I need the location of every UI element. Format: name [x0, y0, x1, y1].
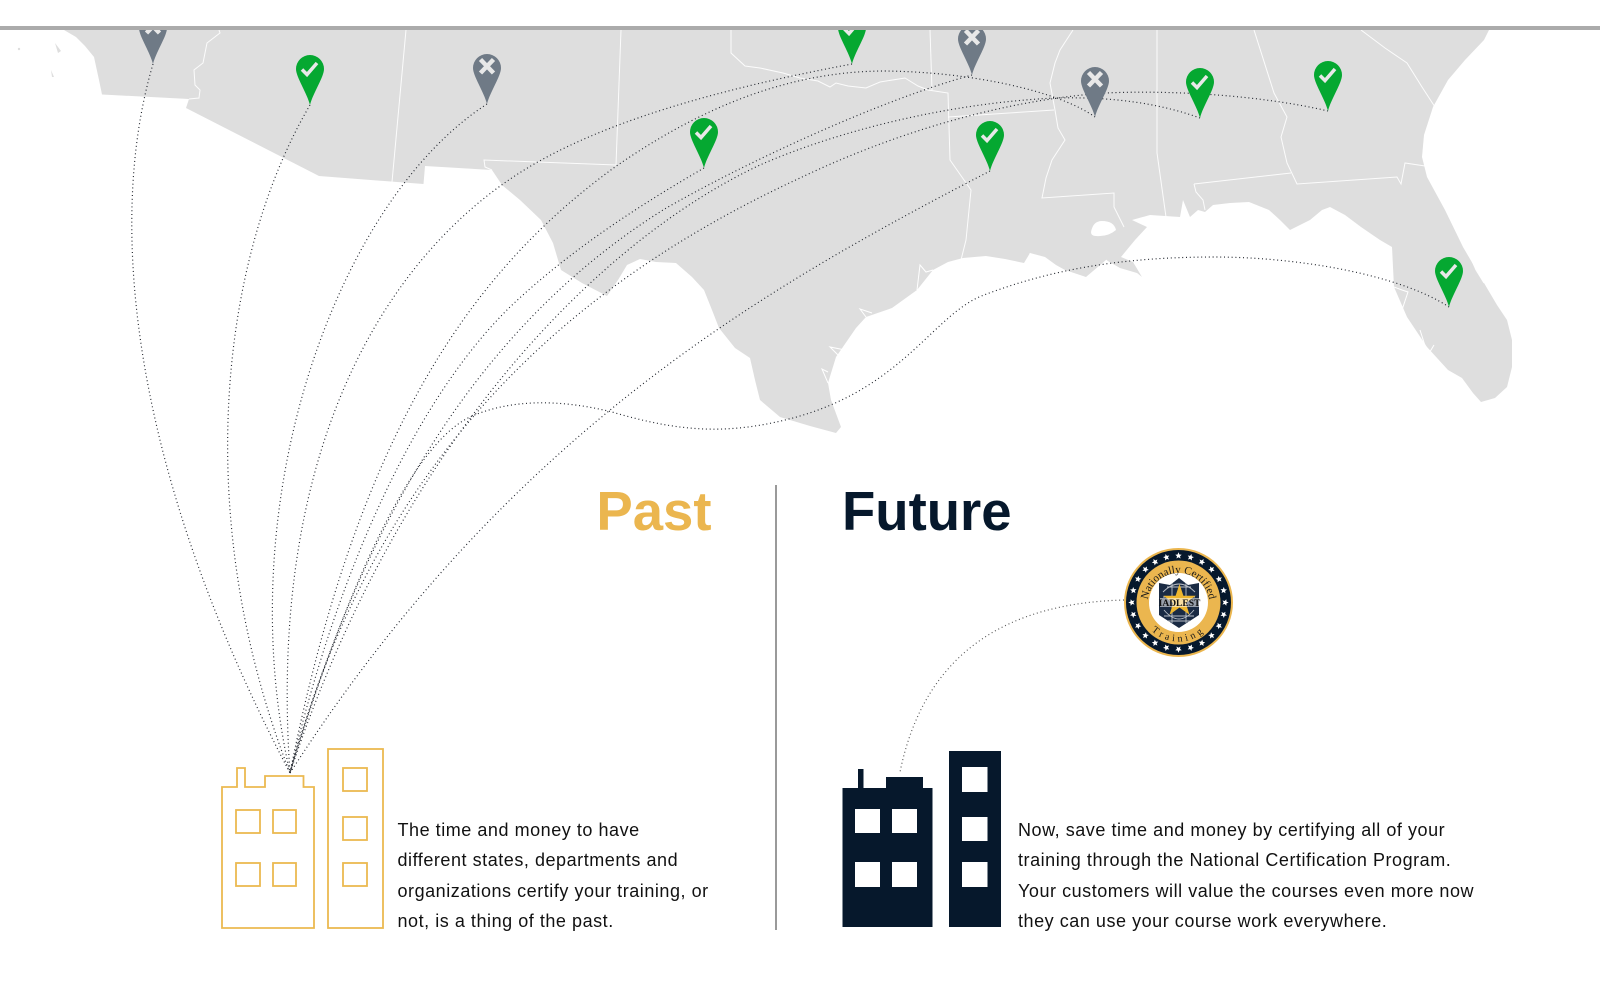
- text: past description: different states, departments and: [398, 850, 678, 870]
- pin: approved, Texas: [690, 118, 718, 168]
- state borders: [189, 30, 1435, 260]
- text: past description: organizations certify your training, or: [398, 881, 709, 901]
- text: past description: [398, 820, 709, 931]
- top rule: [0, 26, 1600, 30]
- text: future description: training through the National Certification Program.: [1018, 850, 1451, 870]
- pin: rejected, Mississippi: [1081, 67, 1109, 117]
- text: past description: not, is a thing of the past.: [398, 911, 614, 931]
- center divider: [775, 485, 777, 930]
- text: past description: The time and money to have: [398, 820, 640, 840]
- dotted line from future building to badge: [900, 600, 1124, 772]
- badge label: IADLEST: [1159, 599, 1201, 609]
- text: future description: Now, save time and money by certifying all of your: [1018, 820, 1445, 840]
- badge shield: [1159, 578, 1199, 628]
- pin: approved, Oklahoma: [838, 30, 866, 64]
- dotted route lines from past building to map pins: [132, 64, 1449, 773]
- badge arc text: Nationally Certified: [1140, 566, 1216, 600]
- icon: Channel Islands specks: [18, 43, 61, 77]
- icon: outlined past buildings: [222, 749, 383, 928]
- pin: rejected, California: [139, 30, 167, 64]
- badge star: [1163, 584, 1196, 615]
- coastal bays: [822, 245, 1484, 383]
- map: southern United States: [18, 14, 1512, 773]
- pin: approved, Alabama: [1186, 68, 1214, 118]
- text: future description: they can use your course work everywhere.: [1018, 911, 1387, 931]
- pin: approved, Louisiana: [976, 121, 1004, 171]
- pin: rejected, Arkansas: [958, 25, 986, 75]
- text: future description: Your customers will value the courses even more now: [1018, 881, 1475, 901]
- badge: nationally certified training seal: Training: [1152, 626, 1204, 642]
- badge: nationally certified training seal: [1124, 548, 1233, 657]
- text: future description: [1018, 820, 1475, 931]
- heading: Past: Past: [596, 481, 712, 542]
- icon: solid future buildings: [842, 751, 1001, 927]
- lake on the Gulf coast: [1091, 221, 1116, 236]
- pin: approved, Georgia: [1314, 61, 1342, 111]
- pin: approved, Arizona: [296, 55, 324, 105]
- heading: Future: Future: [842, 481, 1012, 542]
- badge stars: [1128, 552, 1229, 653]
- pin: approved, Florida: [1435, 257, 1463, 307]
- pin: rejected, New Mexico: [473, 54, 501, 104]
